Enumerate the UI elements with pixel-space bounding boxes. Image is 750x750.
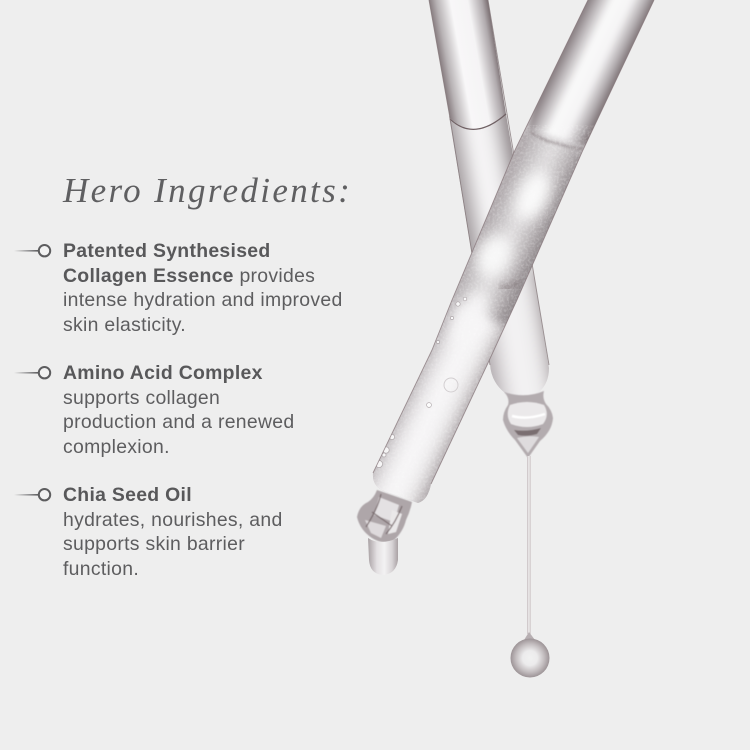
front pipette nozzle <box>357 490 412 542</box>
title: Hero Ingredients: <box>63 171 352 210</box>
description 3 <box>63 484 283 580</box>
product photo: crossed glass pipettes <box>356 0 654 678</box>
description 3: Chia Seed Oil <box>63 484 192 506</box>
falling droplet <box>510 632 550 678</box>
back pipette upper glass <box>429 0 506 129</box>
back pipette rim line <box>450 114 506 129</box>
description 2: complexion. <box>63 436 170 458</box>
bullet marker 2 <box>16 366 52 380</box>
description 1 <box>63 240 343 336</box>
bullet marker 3 <box>16 488 52 502</box>
front pipette liquid lower <box>373 301 504 503</box>
ingredient: amino acid complex <box>16 362 294 458</box>
description 1: intense hydration and improved <box>63 289 343 311</box>
back pipette nozzle bulb <box>503 391 553 458</box>
falling thread of liquid <box>527 456 531 634</box>
front pipette liquid middle <box>454 126 584 329</box>
bullet marker 1 <box>16 244 52 258</box>
description 1: Collagen Essence provides <box>63 264 315 286</box>
front pipette glass body <box>372 0 654 503</box>
front pipette <box>356 0 654 574</box>
description 2 <box>63 362 294 458</box>
description 3: hydrates, nourishes, and <box>63 508 283 530</box>
front pipette upper glass <box>527 0 654 148</box>
description 3: function. <box>63 558 139 580</box>
description 2: production and a renewed <box>63 411 294 433</box>
ingredient: collagen essence <box>16 240 343 336</box>
bubbles <box>375 297 467 468</box>
ingredient: chia seed oil <box>16 484 283 580</box>
back pipette <box>428 0 554 458</box>
back pipette lower glass <box>449 114 549 394</box>
highlights and froth <box>509 167 557 225</box>
description 2: Amino Acid Complex <box>63 362 263 384</box>
description 1: skin elasticity. <box>63 314 186 336</box>
description 3: supports skin barrier <box>63 533 245 555</box>
front pipette hanging drop <box>368 538 398 575</box>
description 2: supports collagen <box>63 386 220 408</box>
description 1: Patented Synthesised <box>63 240 271 262</box>
